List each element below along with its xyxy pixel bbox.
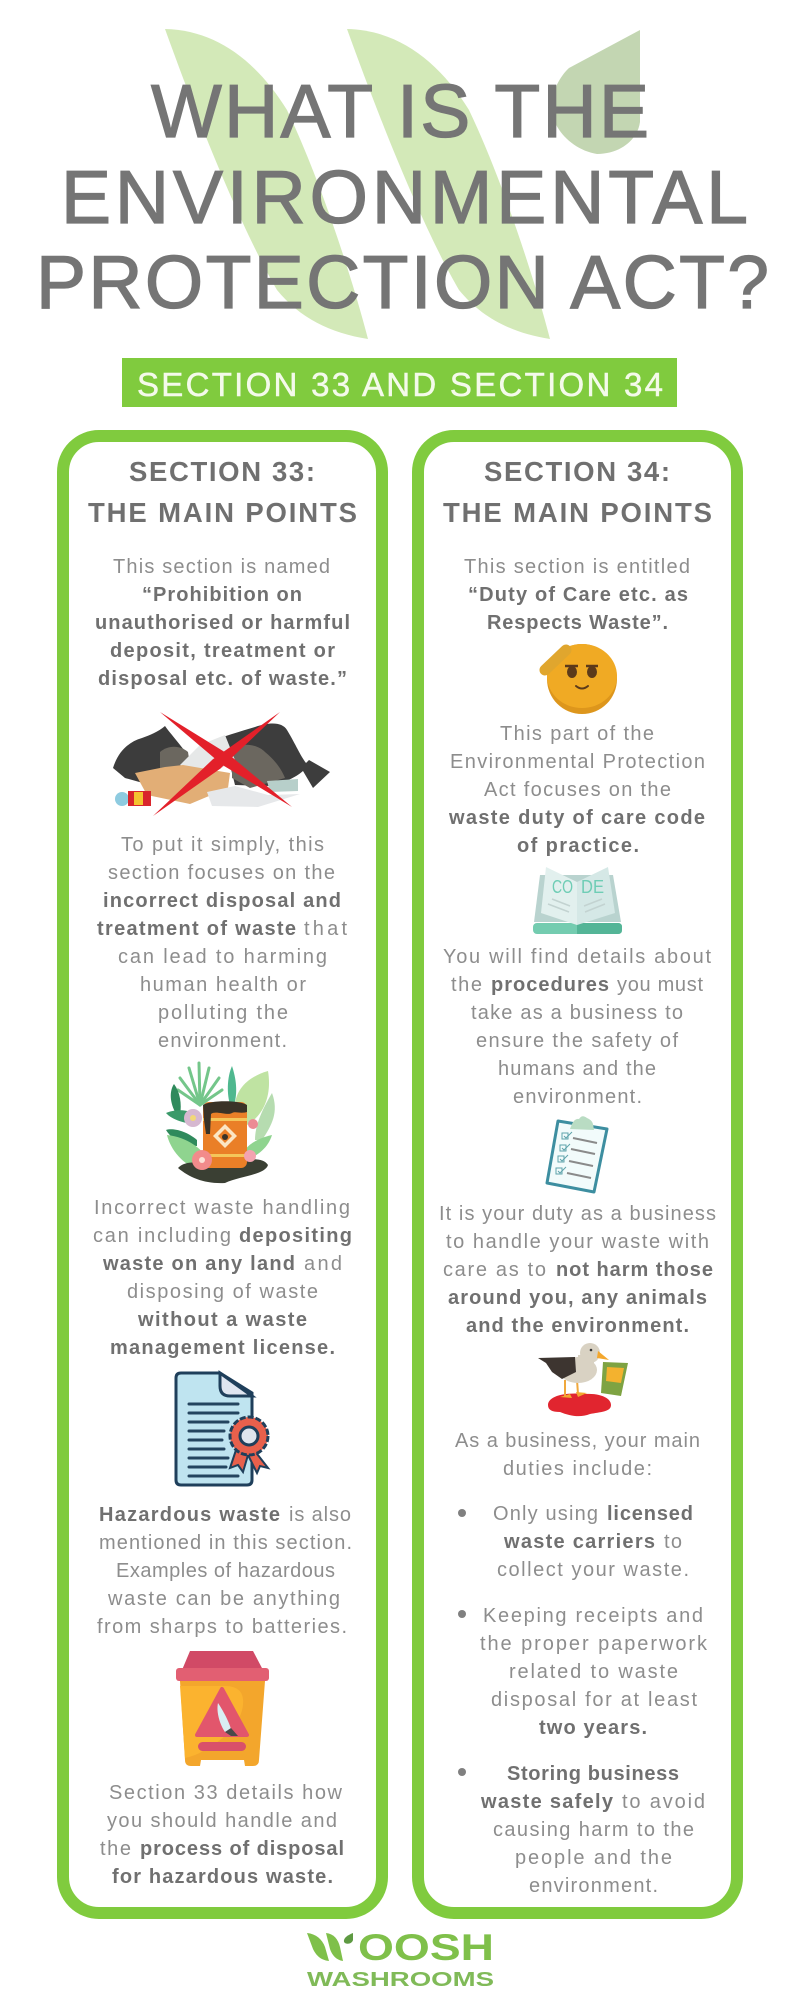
text: section 33 closing: the: [100, 1838, 131, 1860]
text: part of the act: Environmental Protection: [450, 751, 705, 773]
text: section focus: [97, 834, 347, 1052]
title: [36, 69, 769, 324]
text: duty as a business: and the environment.: [466, 1315, 689, 1337]
list item: receipts and paperwork: two years.: [539, 1717, 647, 1739]
text: procedures: take as a business to: [471, 1002, 683, 1024]
list item: licensed waste carriers: collect your waste.: [497, 1559, 689, 1581]
icon: seagull with litter and spill: [538, 1343, 628, 1416]
text: hazardous waste: mentioned in this section.: [99, 1532, 352, 1554]
panel: section 34: [418, 436, 737, 1913]
list item: licensed waste carriers: Only using: [493, 1503, 598, 1525]
title: PROTECTION ACT?: [36, 240, 769, 324]
list item: storing waste safely: people and the: [515, 1847, 672, 1869]
text: section focus: polluting the: [158, 1002, 288, 1024]
text: hazardous waste: waste can be anything: [107, 1588, 340, 1610]
heading: section 33: SECTION 33:: [129, 456, 315, 487]
text: section focus: section focuses on the: [108, 862, 335, 884]
icon: crossed-out rubbish pile: [113, 712, 330, 816]
icon: open code book: DE: [581, 877, 604, 897]
text: section focus: incorrect disposal and: [103, 890, 341, 912]
text: incorrect waste handling: Incorrect waste handling: [94, 1197, 350, 1219]
logo: Woosh Washrooms: [307, 1927, 494, 1991]
banner: section 33 and section 34: SECTION 33 AND SECTION 34: [137, 366, 663, 403]
text: section focus: environment.: [158, 1030, 287, 1052]
text: section title: [464, 556, 690, 634]
heading: section 34: THE MAIN POINTS: [443, 497, 712, 528]
list item: storing waste safely: waste safely: [480, 1791, 614, 1813]
text: section focus: treatment of waste: [97, 918, 296, 940]
icon: saluting emoji: [545, 644, 617, 714]
panel: section 33: [63, 436, 382, 1913]
icon: hazardous waste bin: [176, 1651, 269, 1766]
title: ENVIRONMENTAL: [61, 155, 748, 239]
text: incorrect waste handling: management license.: [110, 1337, 335, 1359]
text: procedures: procedures: [491, 974, 609, 996]
text: section name: disposal etc. of waste.”: [98, 668, 347, 690]
text: part of the act: This part of the: [500, 723, 654, 745]
icon: checklist clipboard: [547, 1116, 607, 1192]
text: main duties intro: As a business, your main: [455, 1430, 700, 1452]
text: section name: “Prohibition on: [142, 584, 302, 606]
text: incorrect waste handling: waste on any land: [102, 1253, 295, 1275]
text: main duties intro: [455, 1430, 700, 1480]
text: section 33 closing: process of disposal: [140, 1838, 344, 1860]
text: part of the act: Act focuses on the: [484, 779, 671, 801]
list item: storing waste safely: causing harm to the: [493, 1819, 694, 1841]
heading: section 33: [88, 456, 357, 528]
heading: section 34: SECTION 34:: [484, 456, 670, 487]
text: procedures: the: [451, 974, 482, 996]
list item: storing waste safely: Storing business: [507, 1763, 679, 1785]
list item: licensed waste carriers: [458, 1503, 693, 1581]
text: section focus: human health or: [140, 974, 306, 996]
text: section 33 closing: Section 33 details how: [109, 1782, 343, 1804]
icon: open code book: [533, 867, 622, 934]
list item: storing waste safely: [458, 1763, 705, 1897]
text: section title: This section is entitled: [464, 556, 690, 578]
text: duty as a business: [439, 1203, 716, 1337]
list item: storing waste safely: environment.: [529, 1875, 658, 1897]
icon: document with rosette: [176, 1373, 268, 1485]
text: hazardous waste: is also: [289, 1504, 351, 1526]
text: duty as a business: not harm those: [556, 1259, 713, 1281]
text: incorrect waste handling: can including: [93, 1225, 231, 1247]
text: section 33 closing: for hazardous waste.: [112, 1866, 333, 1888]
icon: leaking oil barrel among plants: [166, 1063, 275, 1183]
text: procedures: [443, 946, 711, 1108]
heading: section 33: THE MAIN POINTS: [88, 497, 357, 528]
text: hazardous waste: Hazardous waste: [99, 1504, 280, 1526]
text: incorrect waste handling: [93, 1197, 352, 1359]
text: hazardous waste: [97, 1504, 352, 1638]
text: duty as a business: to handle your waste with: [446, 1231, 709, 1253]
text: hazardous waste: Examples of hazardous: [116, 1560, 335, 1582]
text: incorrect waste handling: disposing of waste: [127, 1281, 318, 1303]
text: main duties intro: duties include:: [503, 1458, 652, 1480]
text: procedures: humans and the: [498, 1058, 656, 1080]
heading: section 34: [443, 456, 712, 528]
icon: open code book: CO: [552, 877, 573, 897]
text: part of the act: [448, 723, 705, 857]
text: section title: “Duty of Care etc. as: [468, 584, 688, 606]
logo: Woosh Washrooms: OOSH: [358, 1927, 494, 1968]
title: WHAT IS THE: [151, 69, 649, 153]
text: section name: This section is named: [113, 556, 330, 578]
text: part of the act: waste duty of care code: [448, 807, 705, 829]
text: section 33 closing: you should handle and: [107, 1810, 337, 1832]
background leaf logo: [165, 29, 640, 339]
text: section title: Respects Waste”.: [487, 612, 668, 634]
list item: receipts and paperwork: [458, 1605, 708, 1739]
text: procedures: ensure the safety of: [476, 1030, 678, 1052]
text: section 33 closing: [100, 1782, 344, 1888]
list item: licensed waste carriers: waste carriers: [503, 1531, 655, 1553]
text: incorrect waste handling: without a waste: [137, 1309, 307, 1331]
text: section focus: that: [304, 918, 347, 940]
text: hazardous waste: from sharps to batteries.: [97, 1616, 347, 1638]
text: section name: [95, 556, 350, 690]
text: section focus: can lead to harming: [118, 946, 327, 968]
text: part of the act: of practice.: [517, 835, 639, 857]
text: incorrect waste handling: and: [304, 1253, 342, 1275]
text: duty as a business: care as to: [443, 1259, 546, 1281]
text: duty as a business: It is your duty as a business: [439, 1203, 716, 1225]
list item: licensed waste carriers: licensed: [607, 1503, 693, 1525]
text: section focus: To put it simply, this: [121, 834, 324, 856]
text: procedures: You will find details about: [443, 946, 711, 968]
list item: storing waste safely: to avoid: [622, 1791, 705, 1813]
list item: receipts and paperwork: related to waste: [509, 1661, 678, 1683]
list item: receipts and paperwork: Keeping receipts and: [483, 1605, 703, 1627]
list item: licensed waste carriers: to: [664, 1531, 682, 1553]
text: duty as a business: around you, any animals: [448, 1287, 707, 1309]
text: incorrect waste handling: depositing: [239, 1225, 352, 1247]
logo: Woosh Washrooms: WASHROOMS: [307, 1969, 494, 1991]
text: section name: unauthorised or harmful: [95, 612, 350, 634]
list item: receipts and paperwork: the proper paperwork: [480, 1633, 708, 1655]
text: procedures: you must: [617, 974, 703, 996]
text: procedures: environment.: [513, 1086, 642, 1108]
text: section name: deposit, treatment or: [110, 640, 335, 662]
list item: receipts and paperwork: disposal for at least: [491, 1689, 697, 1711]
